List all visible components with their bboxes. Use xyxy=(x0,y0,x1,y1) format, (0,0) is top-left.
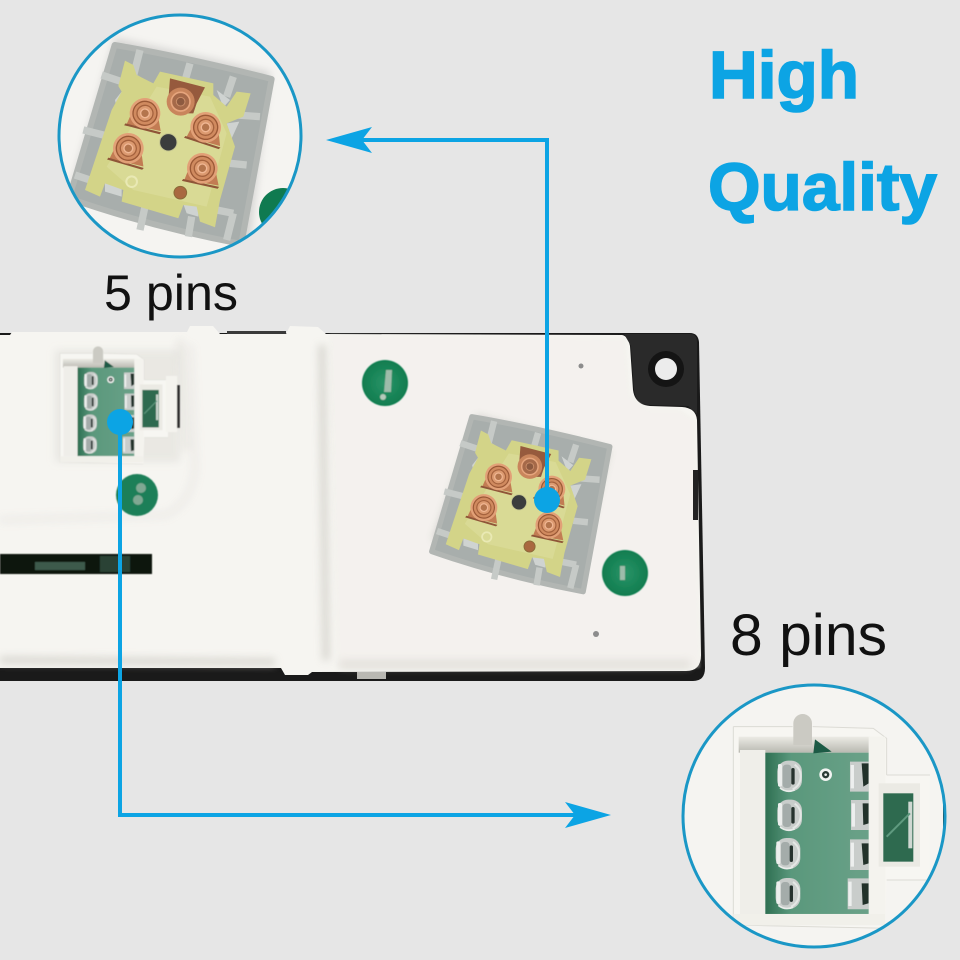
side slot xyxy=(693,470,698,520)
small holes xyxy=(578,364,599,637)
arrow: socket to 5 pins close-up xyxy=(326,127,560,513)
icon: corner screw mount xyxy=(624,334,697,414)
5-pin socket xyxy=(432,417,610,592)
label: 8 pins: 8 pins xyxy=(730,603,887,668)
dark gap at the top xyxy=(227,331,286,334)
arrow: connector to 8 pins close-up xyxy=(107,409,611,828)
heading: High: High xyxy=(709,38,859,113)
black slit with circuit board xyxy=(0,554,152,574)
shadow around 5-pin socket xyxy=(432,415,610,572)
heading: Quality: Quality xyxy=(708,150,937,225)
icon: green solder point, left xyxy=(116,474,158,516)
icon: green solder point, top xyxy=(362,360,408,406)
label: 5 pins: 5 pins xyxy=(104,265,238,321)
panel: switch body rear xyxy=(0,326,705,681)
icon: green solder point, right xyxy=(602,550,648,596)
inset: 5 pins close-up xyxy=(59,15,307,257)
white cover plate xyxy=(0,326,701,675)
8-pin connector xyxy=(55,346,180,464)
black frame xyxy=(0,333,705,681)
inset: 8 pins close-up xyxy=(683,685,948,947)
soft shading of plate sections xyxy=(0,340,690,664)
bottom lugs xyxy=(357,672,386,679)
